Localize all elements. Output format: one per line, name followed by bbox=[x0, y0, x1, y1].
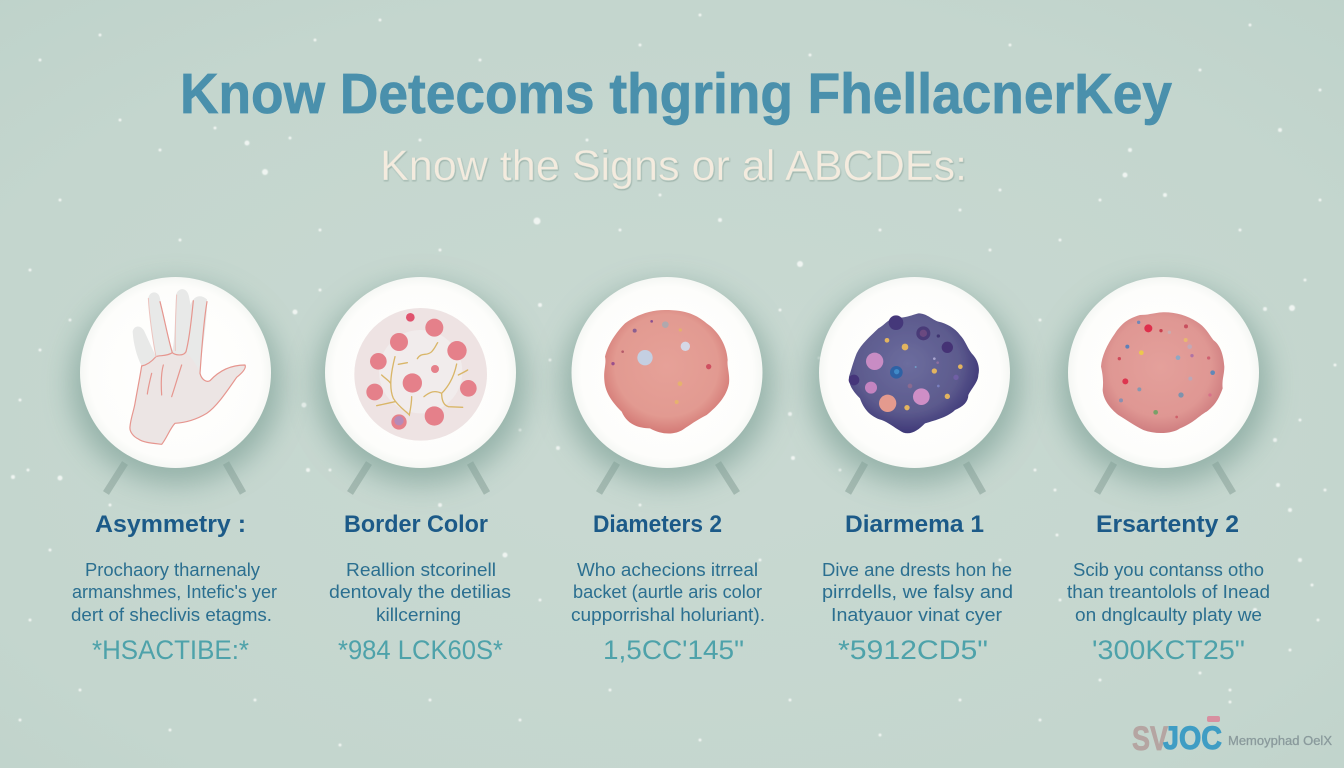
text block: diameters: Who achecions itrreal bbox=[577, 560, 758, 580]
stand legs bbox=[350, 463, 487, 493]
text block: diameters: cupporrishal holuriant). bbox=[571, 605, 765, 625]
text block: diarmema bbox=[822, 511, 1013, 665]
logo: SV bbox=[1132, 720, 1168, 758]
text block: diarmema: pirrdells, we falsy and bbox=[822, 582, 1013, 602]
text block: asymmetry: Prochaory tharnenaly bbox=[85, 560, 260, 580]
text block: diameters bbox=[571, 511, 765, 665]
icon: speckled lesion bbox=[1101, 312, 1224, 433]
text block: diameters: 1,5CC'145" bbox=[603, 635, 744, 665]
text block: ersartenty: than treantolols of Inead bbox=[1067, 582, 1270, 602]
text block: border color: dentovaly the detilias bbox=[329, 582, 511, 602]
stand legs bbox=[599, 463, 737, 493]
logo bbox=[1132, 716, 1332, 758]
text block: diarmema: Diarmema 1 bbox=[845, 511, 984, 538]
text block: asymmetry: *HSACTIBE:* bbox=[92, 635, 249, 665]
text block: border color bbox=[329, 511, 511, 665]
text block: diarmema: *5912CD5" bbox=[838, 635, 988, 665]
plate bbox=[1068, 277, 1259, 468]
text block: border color: *984 LCK60S* bbox=[338, 635, 503, 665]
text block: asymmetry bbox=[71, 511, 277, 665]
stand legs bbox=[1097, 463, 1233, 493]
text block: asymmetry: armanshmes, Intefic's yer bbox=[72, 582, 277, 602]
text block: ersartenty: Ersartenty 2 bbox=[1096, 511, 1239, 538]
icon: hand bbox=[130, 289, 245, 444]
text block: border color: Border Color bbox=[344, 511, 488, 538]
subtitle: Know the Signs or al ABCDEs: bbox=[380, 142, 967, 190]
plate bbox=[572, 277, 762, 468]
logo: JOC bbox=[1163, 720, 1222, 756]
title: Know Detecoms thgring FhellacnerKey bbox=[180, 62, 1172, 126]
stand legs bbox=[848, 463, 983, 493]
text block: asymmetry: Asymmetry : bbox=[95, 511, 246, 538]
panel: asymmetry bbox=[71, 277, 281, 493]
text block: border color: killcerning bbox=[376, 605, 461, 625]
panel: diameter bbox=[562, 277, 772, 493]
text block: ersartenty: on dnglcaulty platy we bbox=[1075, 605, 1262, 625]
logo: Memoyphad OelX bbox=[1228, 733, 1332, 748]
text block: diameters: backet (aurtle aris color bbox=[573, 582, 762, 602]
panel: evolving lesion bbox=[1059, 277, 1269, 493]
text block: border color: Reallion stcorinell bbox=[346, 560, 496, 580]
plate bbox=[819, 277, 1010, 468]
icon: pink lesion bbox=[604, 310, 729, 433]
plate bbox=[325, 277, 516, 468]
text block: ersartenty: '300KCT25" bbox=[1092, 635, 1245, 665]
plate bbox=[80, 277, 271, 468]
text block: diarmema: Dive ane drests hon he bbox=[822, 560, 1012, 580]
text block: ersartenty bbox=[1067, 511, 1270, 665]
text block: ersartenty: Scib you contanss otho bbox=[1073, 560, 1264, 580]
text block: diameters: Diameters 2 bbox=[593, 511, 722, 538]
icon: dark lesion bbox=[849, 313, 979, 433]
text block: asymmetry: dert of sheclivis etagms. bbox=[71, 605, 272, 625]
stand legs bbox=[106, 463, 243, 493]
panel: border bbox=[316, 277, 526, 493]
panel: dark lesion bbox=[810, 277, 1020, 493]
icon: cell dish bbox=[354, 308, 487, 441]
text block: diarmema: Inatyauor vinat cyer bbox=[831, 605, 1002, 625]
